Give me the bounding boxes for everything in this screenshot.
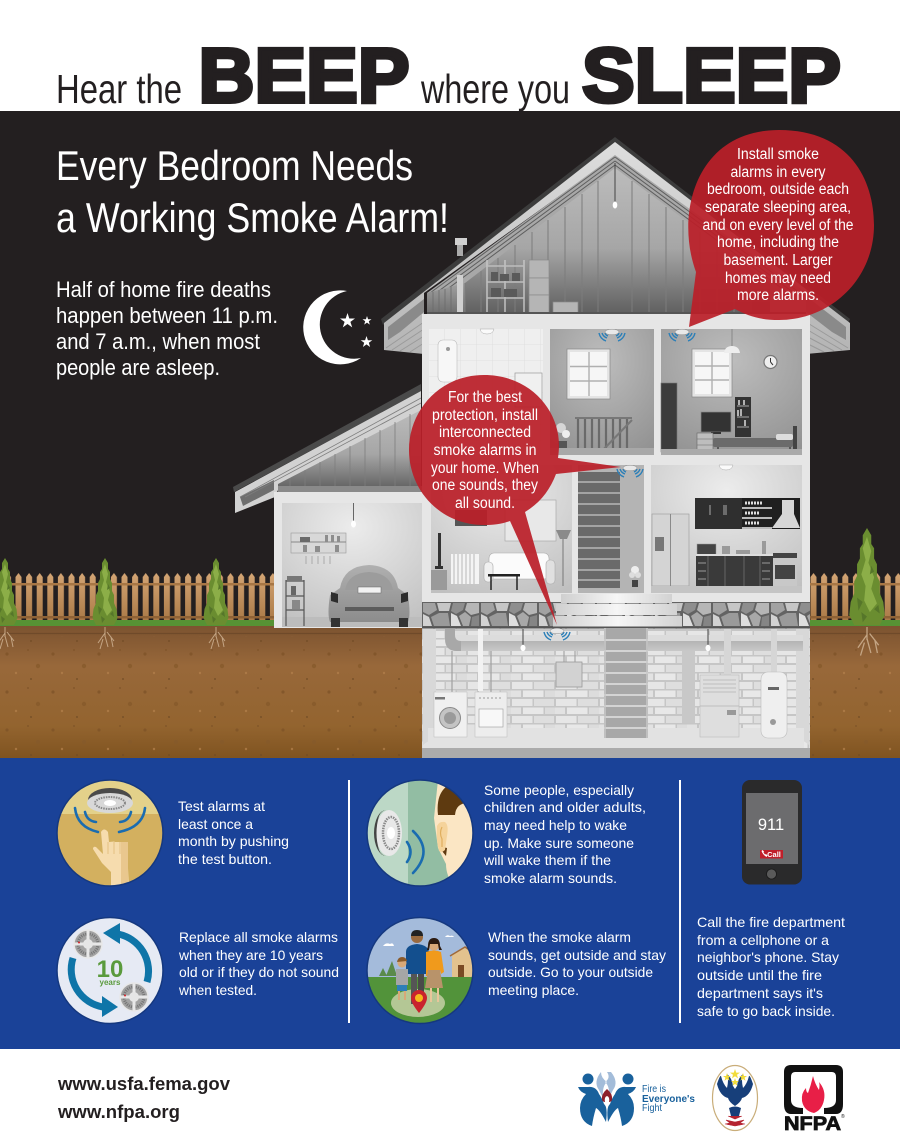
- attic bulb: [613, 163, 617, 208]
- callout: every bedroom: separate sleeping area,: [705, 199, 851, 216]
- microwave: [697, 544, 716, 555]
- counter items: [722, 541, 766, 554]
- statistic text: [56, 277, 278, 380]
- side walls: [423, 629, 809, 745]
- footer URLs: [57, 1073, 231, 1122]
- basement floor: [428, 728, 804, 748]
- floor: [651, 586, 802, 593]
- middle bedroom: [550, 329, 654, 455]
- floor: [661, 449, 802, 455]
- floor: [550, 448, 654, 455]
- call fire department text: outside until the fire: [697, 967, 822, 983]
- test alarm text: the test button.: [178, 851, 272, 867]
- alarm: right bedroom: [669, 329, 695, 341]
- soil left: [0, 626, 423, 759]
- garage roof: [233, 384, 422, 513]
- right bedroom: [661, 329, 802, 455]
- icon: cellphone: Call: [767, 850, 781, 859]
- main walls: [422, 314, 810, 602]
- basement stairs: [604, 628, 648, 738]
- fridge: [652, 514, 689, 586]
- house: [233, 137, 850, 758]
- trees: [0, 528, 885, 656]
- attic planks: [465, 181, 751, 313]
- roof underside lines: [430, 157, 800, 293]
- get outside text: meeting place.: [488, 982, 579, 998]
- icon: cellphone: 911: [758, 816, 784, 834]
- icon: replace after 10 years: years: [100, 978, 121, 987]
- callout: every bedroom: bedroom, outside each: [707, 181, 849, 198]
- grass strip: [0, 620, 900, 626]
- furnace: [700, 675, 739, 737]
- callout: every bedroom: [688, 130, 874, 327]
- window: [505, 500, 556, 541]
- soil speckles: [0, 634, 900, 758]
- bed: [713, 426, 797, 453]
- test alarm text: month by pushing: [178, 833, 289, 849]
- help to wake text: children and older adults,: [484, 799, 646, 815]
- callout: interconnected alarms: [409, 375, 621, 625]
- garage walls: [274, 492, 423, 628]
- help to wake text: [483, 782, 646, 886]
- window: [692, 349, 732, 397]
- fence left: [0, 573, 275, 620]
- callout: every bedroom: alarms in every: [730, 164, 826, 181]
- heading: [56, 142, 449, 241]
- call fire department text: Call the fire department: [697, 914, 845, 930]
- alarm: stairwell: [617, 465, 643, 477]
- replace alarm text: when they are 10 years: [178, 947, 323, 963]
- logo: Fire is Everyone's Fight: [578, 1072, 695, 1126]
- header background: [0, 0, 900, 111]
- garage light: [351, 503, 356, 528]
- get outside text: When the smoke alarm: [488, 929, 631, 945]
- main roof: [381, 137, 850, 354]
- logo: NFPA: NFPA: [784, 1114, 841, 1135]
- heading: Every Bedroom Needs: [56, 142, 413, 189]
- ceiling lamp: [719, 465, 733, 470]
- footer URLs: www.usfa.fema.gov: [57, 1073, 231, 1094]
- callout: every bedroom: home, including the: [717, 234, 839, 251]
- floor lamp: [556, 530, 571, 586]
- footer background: [0, 1049, 900, 1136]
- logo: Fire is Everyone's Fight: Fire is: [642, 1083, 666, 1095]
- test alarm text: Test alarms at: [178, 798, 265, 814]
- stove: [773, 553, 797, 588]
- attic shelf: [487, 260, 524, 314]
- callout: interconnected alarms: For the best: [448, 389, 523, 406]
- blue tips panel: [0, 758, 900, 1049]
- bath mirror: [515, 373, 542, 407]
- garage interior: [282, 503, 423, 626]
- title: SLEEP: [582, 33, 841, 119]
- car: [328, 565, 410, 627]
- night sky panel: [0, 111, 900, 759]
- roof inner band: [427, 155, 806, 314]
- icon: test alarm: [57, 780, 163, 888]
- help to wake text: Some people, especially: [484, 782, 634, 798]
- logo: USFA eagle: [712, 1066, 758, 1130]
- test alarm text: least once a: [178, 816, 253, 832]
- range hood: [772, 498, 800, 529]
- statistic text: happen between 11 p.m.: [56, 303, 278, 328]
- get outside text: [488, 929, 666, 998]
- coffee table: [488, 574, 520, 590]
- callout: interconnected alarms: interconnected: [439, 424, 531, 441]
- help to wake text: will wake them if the: [483, 852, 611, 868]
- icon: cellphone: [742, 780, 802, 884]
- title: where you: [420, 66, 570, 112]
- plant: [629, 566, 641, 587]
- callout: interconnected alarms: one sounds, they: [432, 477, 538, 494]
- callout: every bedroom: basement. Larger: [724, 252, 832, 269]
- front steps: [553, 594, 682, 627]
- sofa: [484, 553, 555, 584]
- attic floor edge: [427, 312, 806, 314]
- stairwell: [572, 465, 644, 593]
- callout: interconnected alarms: protection, install: [432, 407, 538, 424]
- replace alarm text: old or if they do not sound: [179, 964, 339, 980]
- icon: family outside: [367, 918, 477, 1024]
- eave boxes: [386, 296, 848, 352]
- bookcase: [735, 397, 751, 437]
- icon: help to wake up: [367, 780, 478, 886]
- clock: [764, 356, 777, 368]
- TV stand: [431, 533, 447, 590]
- help to wake text: smoke alarm sounds.: [484, 870, 617, 886]
- callout: interconnected alarms: smoke alarms in: [434, 442, 536, 459]
- flight of stairs: [578, 472, 620, 588]
- callout: every bedroom: homes may need: [725, 270, 831, 287]
- bath water heater: [438, 340, 457, 382]
- roof shingle edge: [381, 137, 850, 325]
- basement floor slab: [422, 748, 810, 758]
- washer: [434, 692, 467, 737]
- upper cabinets: [695, 498, 742, 529]
- get outside text: outside. Go to your outside: [488, 964, 653, 980]
- callout: interconnected alarms: all sound.: [455, 495, 515, 512]
- test alarm text: [178, 798, 289, 867]
- help to wake text: up. Make sure someone: [484, 835, 634, 851]
- callout: interconnected alarms: your home. When: [431, 460, 539, 477]
- alarm: middle bedroom: [599, 329, 625, 341]
- logo: Fire is Everyone's Fight: Everyone's: [642, 1093, 695, 1105]
- stone foundation: [422, 602, 810, 627]
- replace alarm text: [178, 929, 339, 998]
- footer URLs: www.nfpa.org: [57, 1101, 180, 1122]
- call fire department text: neighbor's phone. Stay: [697, 949, 839, 965]
- pendant lamp: [724, 329, 740, 353]
- window: [567, 349, 610, 399]
- dryer: [475, 692, 507, 737]
- call fire department text: department says it's: [697, 985, 823, 1001]
- replace alarm text: Replace all smoke alarms: [179, 929, 338, 945]
- callout: every bedroom: more alarms.: [737, 287, 819, 304]
- heading: a Working Smoke Alarm!: [56, 194, 449, 241]
- call fire department text: [697, 914, 845, 1019]
- attic left recess: [427, 283, 465, 313]
- statistic text: Half of home fire deaths: [56, 277, 271, 302]
- soil right: [809, 626, 900, 759]
- column dividers: [348, 780, 681, 1023]
- vent pipe: [455, 238, 467, 313]
- attic boxes: [529, 260, 578, 313]
- banister: [575, 417, 632, 453]
- title: BEEP: [198, 33, 410, 119]
- statistic text: and 7 a.m., when most: [56, 329, 261, 354]
- open shelves: [742, 498, 772, 529]
- callout: every bedroom: Install smoke: [737, 146, 819, 163]
- bath ceiling lamp: [480, 329, 494, 334]
- kitchen: [651, 465, 802, 593]
- title: Hear the: [56, 66, 182, 112]
- callout: every bedroom: and on every level of the: [702, 217, 854, 234]
- roof fascia: [384, 142, 850, 354]
- water heater: [761, 672, 787, 738]
- replace alarm text: when tested.: [178, 982, 257, 998]
- get outside text: sounds, get outside and stay: [488, 947, 666, 963]
- icon: moon and stars: [303, 290, 372, 364]
- garage: [233, 384, 423, 628]
- alarm: basement: [544, 628, 570, 640]
- call fire department text: from a cellphone or a: [697, 932, 829, 948]
- base cabinets: [696, 554, 773, 588]
- ducts: [445, 629, 803, 723]
- TV: [701, 412, 731, 434]
- logo: NFPA: [784, 1065, 845, 1135]
- living room: [431, 465, 572, 593]
- logo: Fire is Everyone's Fight: Fight: [642, 1102, 662, 1114]
- garage shelves: [291, 533, 346, 564]
- wardrobe door: [661, 383, 677, 452]
- statistic text: people are asleep.: [56, 355, 220, 380]
- radiator: [451, 554, 479, 584]
- garage cart: [286, 576, 304, 626]
- bulbs: [520, 629, 710, 651]
- icon: replace after 10 years: 10: [97, 956, 123, 983]
- icon: replace after 10 years: [57, 918, 163, 1024]
- call fire department text: safe to go back inside.: [697, 1003, 835, 1019]
- dresser: [697, 433, 713, 451]
- help to wake text: may need help to wake: [484, 817, 627, 833]
- picture: [455, 510, 487, 526]
- bathroom: [429, 329, 543, 455]
- fence right: [810, 573, 900, 620]
- logo: NFPA: ®: [841, 1113, 845, 1120]
- electrical panel: [556, 651, 582, 687]
- garage floor: [282, 617, 423, 627]
- plant: [556, 423, 570, 449]
- attic wall: [465, 168, 770, 314]
- basement: [422, 626, 810, 758]
- title: [56, 33, 841, 119]
